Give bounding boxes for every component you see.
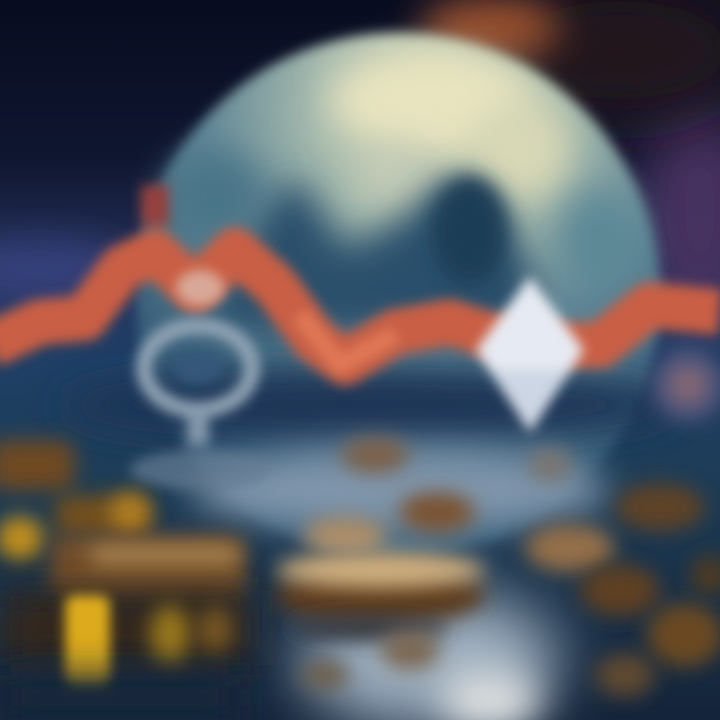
pale reflection area (190, 448, 610, 720)
orange glow behind moon (420, 0, 560, 60)
gold coins centre (275, 437, 485, 689)
icon: white diamond symbol (476, 276, 584, 432)
icon: right faint coin (652, 349, 720, 421)
dark mid band (60, 367, 680, 443)
moon (136, 33, 660, 557)
gold coins right (525, 449, 720, 697)
red market line (0, 185, 720, 365)
gold coins left (0, 440, 250, 720)
icon: left crypto symbol (130, 270, 270, 490)
